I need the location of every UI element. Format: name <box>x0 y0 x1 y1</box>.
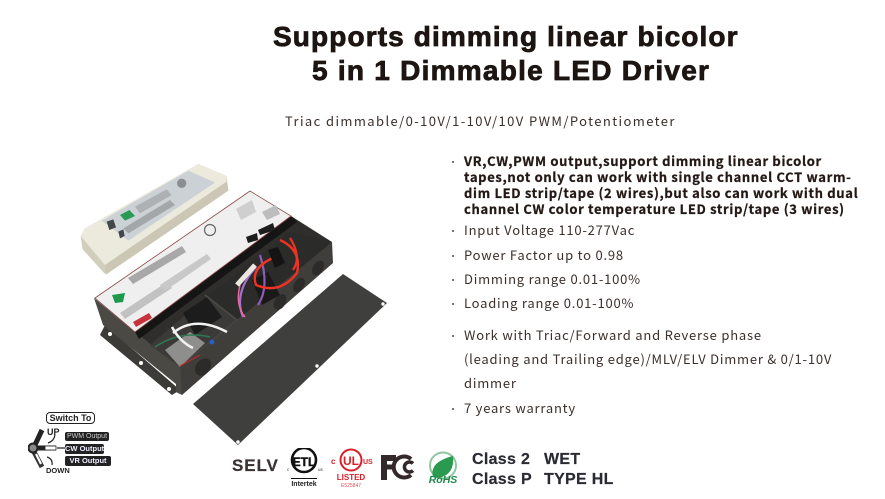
ETL mark: c <box>287 467 290 472</box>
front wall <box>180 242 333 395</box>
ETL mark: us <box>318 467 323 472</box>
toggle icon <box>28 428 65 468</box>
dimmer compatibility <box>464 325 832 392</box>
top label <box>95 191 291 332</box>
feature list <box>452 151 858 417</box>
left side wall <box>94 298 182 395</box>
CW output tag: CW Output <box>65 444 104 453</box>
ETL mark: Intertek <box>291 481 317 488</box>
title: Supports dimming linear bicolor <box>273 21 739 52</box>
cUL listed mark <box>331 448 373 489</box>
dimmer compatibility: dimmer <box>464 373 517 392</box>
black cover plate <box>193 274 387 445</box>
wet and type ratings: TYPE HL <box>544 471 614 488</box>
title <box>273 21 739 86</box>
box interior <box>135 216 332 367</box>
cUL listed mark: UL <box>343 454 359 468</box>
product photo <box>80 164 387 445</box>
switch to label: Switch To <box>50 413 91 423</box>
wires and parts <box>165 332 205 367</box>
small white driver <box>81 164 228 275</box>
ETL mark: ETL <box>293 455 315 469</box>
warranty: 7 years warranty <box>464 398 576 417</box>
ETL mark <box>287 448 323 488</box>
dimming range: Dimming range 0.01-100% <box>464 269 641 288</box>
dimmer compatibility: Work with Triac/Forward and Reverse phase <box>464 325 762 344</box>
bold feature text: VR,CW,PWM output,support dimming linear bicolor <box>464 151 822 170</box>
loading range: Loading range 0.01-100% <box>464 293 634 312</box>
wet and type ratings <box>544 451 614 488</box>
bold feature text: tapes,not only can work with single channel CCT warm- <box>464 167 852 186</box>
knockouts <box>192 355 214 379</box>
cUL listed mark: c <box>331 457 336 466</box>
class ratings <box>472 451 532 488</box>
switch diagram <box>28 412 111 475</box>
class ratings: Class P <box>472 471 532 488</box>
bold feature text: channel CW color temperature LED strip/tape (3 wires) <box>464 199 845 218</box>
wet and type ratings: WET <box>544 451 580 468</box>
rim <box>135 216 297 339</box>
class ratings: Class 2 <box>472 451 530 468</box>
flange holes <box>108 332 112 336</box>
metal junction box <box>94 191 333 395</box>
cUL listed mark: E525847 <box>341 483 361 489</box>
FCC mark <box>381 454 414 480</box>
bullet dots <box>452 161 454 410</box>
VR output tag: VR Output <box>69 456 107 465</box>
SELV label: SELV <box>232 456 279 475</box>
mounting flange <box>100 325 180 395</box>
subtitle: Triac dimmable/0-10V/1-10V/10V PWM/Potentiometer <box>285 111 676 130</box>
bold feature text: dim LED strip/tape (2 wires),but also can work with dual <box>464 183 858 202</box>
dimmer compatibility: (leading and Trailing edge)/MLV/ELV Dimmer & 0/1-10V <box>464 349 832 368</box>
PWM output tag: PWM Output <box>67 433 107 440</box>
title: 5 in 1 Dimmable LED Driver <box>312 55 710 86</box>
bold feature text <box>464 151 858 218</box>
power factor: Power Factor up to 0.98 <box>464 245 624 264</box>
DOWN label: DOWN <box>46 466 70 475</box>
UP label: UP <box>47 427 60 437</box>
RoHS mark <box>428 452 458 485</box>
input voltage: Input Voltage 110-277Vac <box>464 220 635 239</box>
cUL listed mark: LISTED <box>337 473 365 482</box>
cUL listed mark: US <box>363 459 373 466</box>
